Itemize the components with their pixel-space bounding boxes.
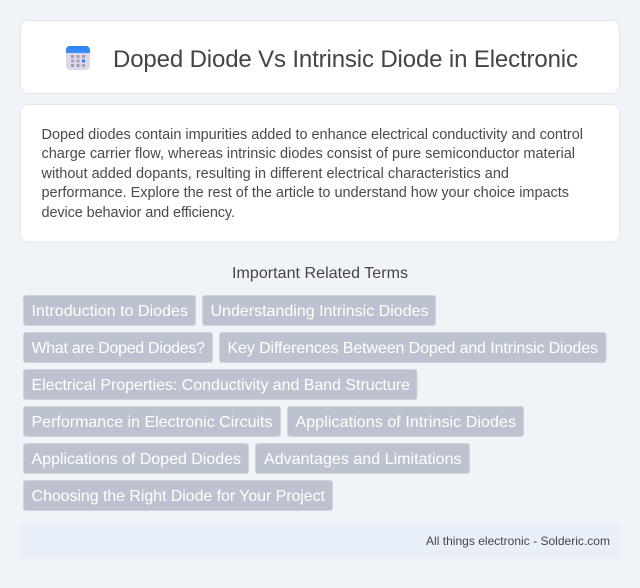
tag: doped diodes [24, 332, 212, 362]
footer: All things electronic - Solderic.com [426, 534, 610, 548]
tag list: related terms [24, 296, 606, 510]
tag: performance [24, 406, 280, 436]
tag: applications intrinsic: Applications of Intrinsic Diodes [296, 414, 516, 431]
tag: applications intrinsic [288, 406, 524, 436]
tag: advantages [256, 444, 470, 474]
tag: electrical properties: Electrical Properties: Conductivity and Band Structure [32, 377, 410, 394]
text block: description: performance. Explore the rest of the article to understand how your choice impacts [42, 185, 569, 201]
text block: description: charge carrier flow, whereas intrinsic diodes consist of pure semiconductor material [42, 146, 575, 162]
tag: electrical properties [24, 370, 417, 400]
tag: understanding intrinsic: Understanding Intrinsic Diodes [210, 303, 428, 320]
text block: description: without added dopants, resulting in different electrical characteristics and [40, 166, 509, 182]
text block: description: device behavior and efficiency. [42, 205, 235, 221]
text block: description [40, 127, 583, 221]
footer [20, 524, 620, 558]
tag: key differences [220, 332, 606, 362]
text block: description: Doped diodes contain impurities added to enhance electrical conductivity and control [42, 127, 583, 143]
heading: related terms: Important Related Terms [232, 265, 408, 282]
tag: choosing [24, 480, 332, 510]
tag: choosing: Choosing the Right Diode for Your Project [32, 488, 326, 505]
tag: advantages: Advantages and Limitations [264, 451, 462, 468]
tag: applications doped [24, 444, 248, 474]
panel: title card [20, 20, 620, 94]
tag: key differences: Key Differences Between Doped and Intrinsic Diodes [228, 340, 598, 357]
tag: understanding intrinsic [202, 296, 436, 326]
tag: introduction [24, 296, 196, 326]
title: Doped Diode Vs Intrinsic Diode in Electronic [113, 46, 578, 73]
icon: calendar grid [66, 46, 90, 70]
tag: performance: Performance in Electronic Circuits [32, 414, 272, 431]
panel: description [20, 104, 620, 242]
tag: introduction: Introduction to Diodes [32, 303, 188, 320]
tag: applications doped: Applications of Doped Diodes [32, 451, 241, 468]
tag: doped diodes: What are Doped Diodes? [32, 340, 205, 357]
